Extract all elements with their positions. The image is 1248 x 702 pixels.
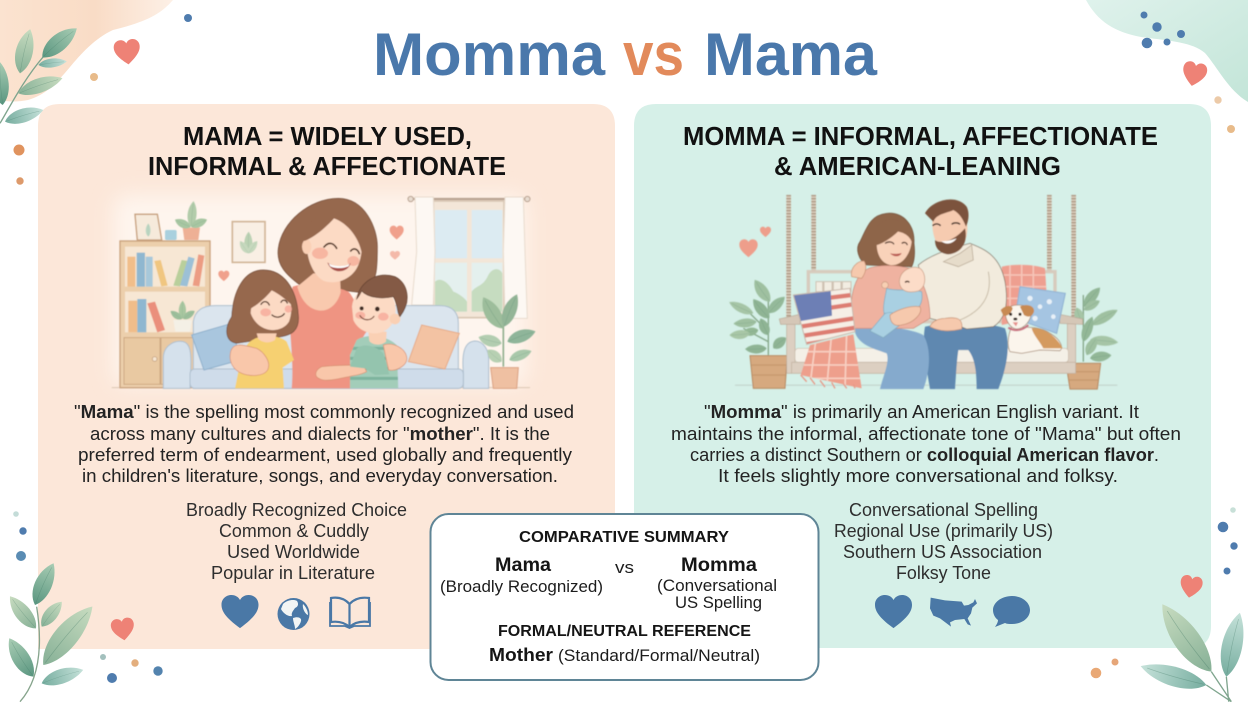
watercolor wash: top left: [0, 0, 173, 102]
momma column: US Spelling: [675, 593, 762, 612]
sofa: [163, 306, 489, 388]
body text: mama: across many cultures and dialects for " mother". It is the: [90, 424, 550, 444]
momma column: Momma: [681, 554, 757, 576]
icon: globe: [278, 598, 310, 630]
body text: mama: preferred term of endearment, used globally and frequently: [78, 445, 572, 465]
mama column: Mama: [495, 554, 551, 576]
panel: mama: [38, 104, 615, 649]
flag pillow: [792, 288, 856, 346]
icon: speech bubble: [993, 596, 1030, 627]
body text: mama: [74, 402, 574, 486]
hearts: [218, 226, 404, 281]
hearts: [739, 227, 771, 257]
feature list: momma: Conversational Spelling: [849, 500, 1038, 520]
body text: momma: "Momma" is primarily an American English variant. It: [704, 402, 1139, 422]
baby: [870, 267, 925, 338]
momma column: [657, 554, 777, 612]
title: Momma: [373, 21, 606, 88]
feature list: mama: Broadly Recognized Choice: [186, 500, 407, 520]
body text: mama: "Mama" is the spelling most commonly recognized and used: [74, 402, 574, 422]
icon: heart (momma): [875, 595, 912, 628]
summary heading: COMPARATIVE SUMMARY: [519, 529, 729, 546]
icon: heart (mama): [222, 595, 258, 628]
body text: momma: It feels slightly more conversational and folksy.: [718, 466, 1118, 486]
blue pillow: [192, 323, 240, 370]
heading: mama: INFORMAL & AFFECTIONATE: [148, 151, 506, 181]
left plant: [727, 277, 789, 388]
heading: momma: MOMMA = INFORMAL, AFFECTIONATE: [683, 121, 1158, 151]
wall frame: [232, 222, 265, 262]
title: vs: [623, 21, 684, 88]
formal reference heading: FORMAL/NEUTRAL REFERENCE: [498, 623, 751, 640]
mom: [851, 213, 930, 389]
body text: momma: [671, 402, 1181, 486]
feature list: mama: Used Worldwide: [227, 542, 360, 562]
icon: United States map: [930, 598, 977, 627]
panel: momma: [634, 104, 1211, 648]
mama column: [440, 554, 603, 596]
peach pillow: [408, 325, 459, 369]
heading: mama: MAMA = WIDELY USED,: [183, 121, 472, 151]
body text: momma: maintains the informal, affectionate tone of "Mama" but often: [671, 424, 1181, 444]
mama column: (Broadly Recognized): [440, 577, 603, 596]
formal reference line: Mother: [489, 644, 553, 665]
heading: momma: & AMERICAN-LEANING: [774, 151, 1061, 181]
watercolor wash: top right: [1086, 0, 1248, 102]
plaid throw: [1000, 263, 1048, 327]
formal reference line: (Standard/Formal/Neutral): [558, 647, 760, 665]
illustration: mother hugging two children on a sofa: [112, 195, 537, 388]
leaf sprig: bottom right: [1138, 597, 1248, 702]
feature list: mama: [186, 500, 407, 583]
window: [408, 196, 530, 318]
feature list: mama: Popular in Literature: [211, 563, 375, 583]
star pillow: [1015, 287, 1065, 333]
bookshelf: [120, 201, 210, 388]
dog: [1001, 305, 1063, 353]
feature list: mama: Common & Cuddly: [219, 521, 369, 541]
vs label: vs: [615, 558, 634, 577]
potted plant: [476, 292, 537, 388]
comparative summary box: [430, 514, 818, 680]
swing ropes: [789, 195, 1074, 318]
plaid blanket: [800, 333, 863, 390]
body text: mama: in children's literature, songs, and everyday conversation.: [82, 466, 558, 486]
feature list: momma: Folksy Tone: [896, 563, 991, 583]
right plant: [1066, 284, 1120, 389]
feature list: momma: [834, 500, 1053, 583]
momma column: (Conversational: [657, 576, 777, 595]
icon: open book: [330, 598, 370, 628]
dad: [918, 199, 1008, 389]
formal reference line: [489, 644, 760, 665]
illustration: couple with baby and dog on a porch swing: [727, 195, 1120, 390]
leaf sprig: bottom left: [2, 560, 101, 702]
feature list: momma: Southern US Association: [843, 542, 1042, 562]
swing bench: [779, 272, 1083, 373]
girl: [227, 270, 299, 388]
feature list: momma: Regional Use (primarily US): [834, 521, 1053, 541]
mother's left arm around girl: [230, 345, 269, 376]
heading: momma: [683, 121, 1158, 181]
leaf sprig: top left: [0, 21, 82, 128]
body text: momma: carries a distinct Southern or colloquial American flavor.: [690, 445, 1159, 465]
heading: mama: [148, 121, 506, 181]
mother: [278, 198, 377, 388]
title: Mama: [704, 21, 878, 88]
boy: [316, 275, 407, 388]
